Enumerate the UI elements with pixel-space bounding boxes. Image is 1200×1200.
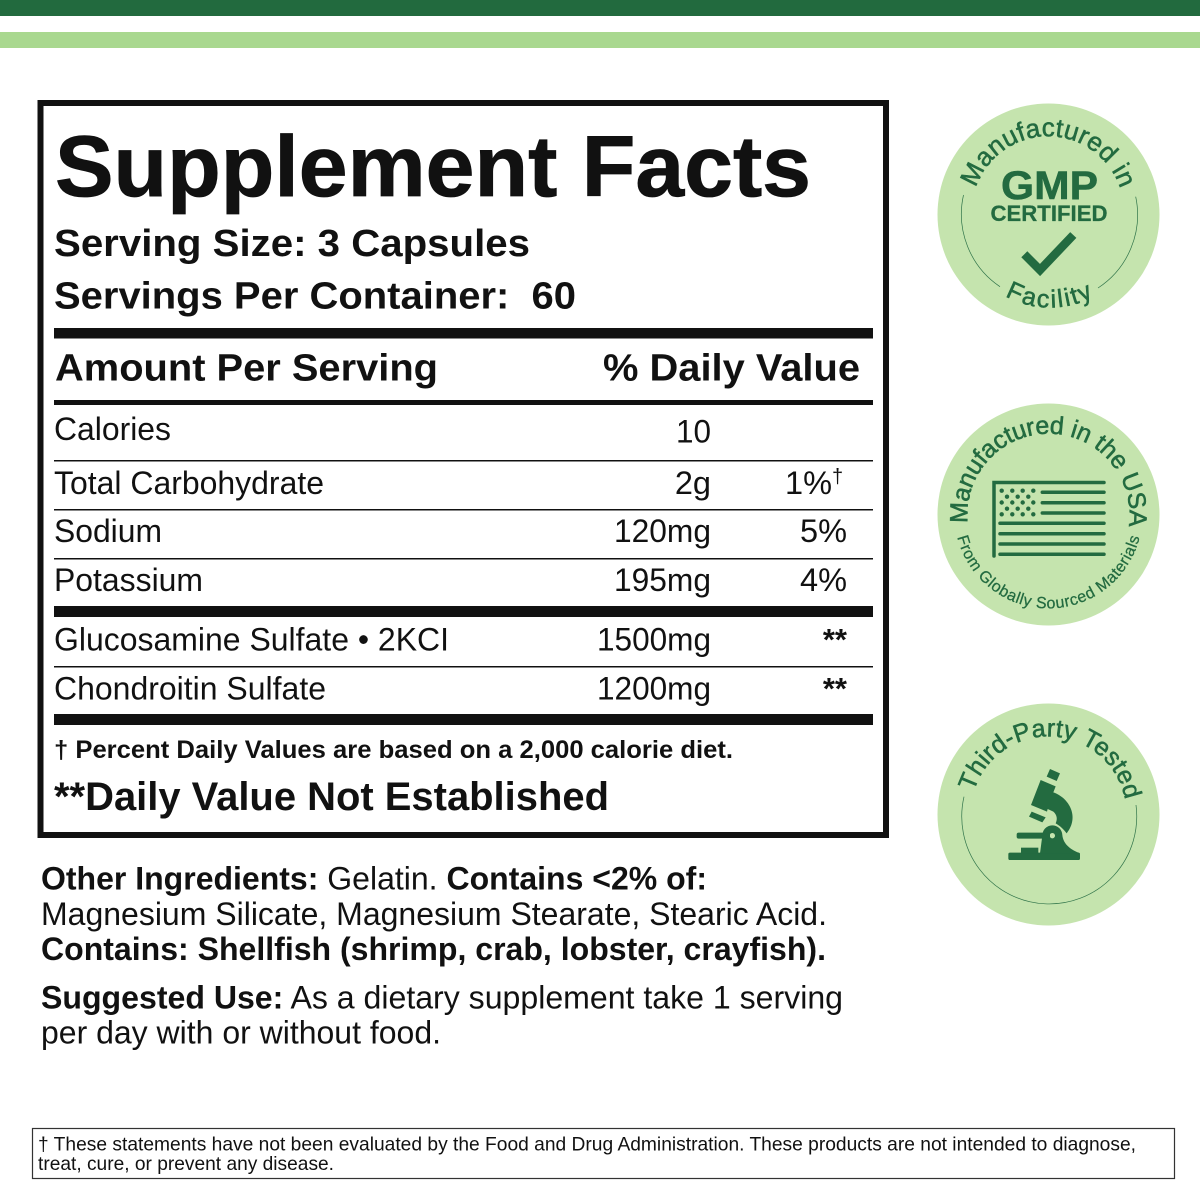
badge arc text: third-party tested: Third-Party Tested [958, 720, 1143, 799]
disclaimer box [32, 1128, 1174, 1178]
row: total carbohydrate: † [832, 466, 843, 488]
badge: manufactured in the USA [938, 404, 1160, 626]
row: sodium: 5% [800, 513, 847, 549]
badge arc text: from globally sourced materials: From Globally Sourced Materials [957, 535, 1140, 609]
icon: check mark [1024, 235, 1073, 270]
serving size: Serving Size: 3 Capsules [54, 223, 530, 265]
row: sodium [54, 513, 847, 549]
text block: suggested use: per day with or without food. [41, 1014, 441, 1050]
icon: american flag [994, 482, 1104, 556]
disclaimer box: † These statements have not been evaluated by the Food and Drug Administration. These products are not intended to diagnose, [38, 1134, 1136, 1156]
column heading: amount per serving: Amount Per Serving [55, 348, 438, 390]
row: sodium: Sodium [54, 513, 162, 549]
footnote: percent daily values: † Percent Daily Values are based on a 2,000 calorie diet. [54, 736, 733, 764]
badge text: GMP: GMP [1001, 164, 1098, 208]
text block: suggested use [41, 980, 843, 1050]
row: potassium: 4% [800, 562, 847, 598]
row: glucosamine sulfate: 1500mg [597, 622, 711, 658]
row: calories [54, 411, 711, 450]
badge text: certified: CERTIFIED [990, 201, 1108, 226]
row: total carbohydrate [54, 465, 843, 501]
row: total carbohydrate: 2g [675, 465, 711, 501]
row: glucosamine sulfate: ** [823, 622, 848, 657]
row: glucosamine sulfate: Glucosamine Sulfate • 2KCI [54, 622, 449, 658]
row: chondroitin sulfate [54, 670, 848, 706]
icon: microscope [1008, 769, 1080, 860]
panel: supplement facts [40, 103, 886, 835]
badge arc text: manufactured in: Manufactured in [960, 120, 1132, 188]
badge: third-party tested [938, 704, 1160, 926]
row: potassium: Potassium [54, 562, 203, 598]
row: calories: 10 [676, 414, 711, 450]
row: chondroitin sulfate: ** [823, 671, 848, 706]
row: potassium [54, 562, 847, 598]
row: chondroitin sulfate: Chondroitin Sulfate [54, 670, 326, 706]
servings per container: Servings Per Container: 60 [54, 276, 576, 318]
title: Supplement Facts [55, 119, 811, 215]
row: sodium: 120mg [614, 513, 711, 549]
text block: other ingredients: Contains: Shellfish (shrimp, crab, lobster, crayfish). [41, 931, 826, 967]
footnote: daily value not established: **Daily Value Not Established [54, 775, 609, 819]
disclaimer box: treat, cure, or prevent any disease. [38, 1153, 334, 1175]
text block: other ingredients: Other Ingredients: Gelatin. Contains <2% of: [41, 860, 707, 896]
row: calories: Calories [54, 411, 171, 447]
text block: other ingredients: Magnesium Silicate, Magnesium Stearate, Stearic Acid. [41, 896, 827, 932]
row: total carbohydrate: Total Carbohydrate [54, 465, 324, 501]
row: potassium: 195mg [614, 562, 711, 598]
text block: suggested use: Suggested Use: As a dietary supplement take 1 serving [41, 980, 843, 1016]
badge: GMP certified [938, 104, 1160, 326]
top light green band [0, 32, 1200, 48]
column heading: daily value: % Daily Value [603, 348, 860, 390]
row: total carbohydrate: 1% [785, 465, 832, 501]
top dark green band [0, 0, 1200, 16]
badge arc text: manufactured in the USA: Manufactured in the USA [950, 416, 1147, 527]
row: glucosamine sulfate [54, 622, 848, 658]
badge arc text: facility: Facility [1006, 281, 1090, 308]
text block: other ingredients [41, 860, 827, 967]
row: chondroitin sulfate: 1200mg [597, 670, 711, 706]
